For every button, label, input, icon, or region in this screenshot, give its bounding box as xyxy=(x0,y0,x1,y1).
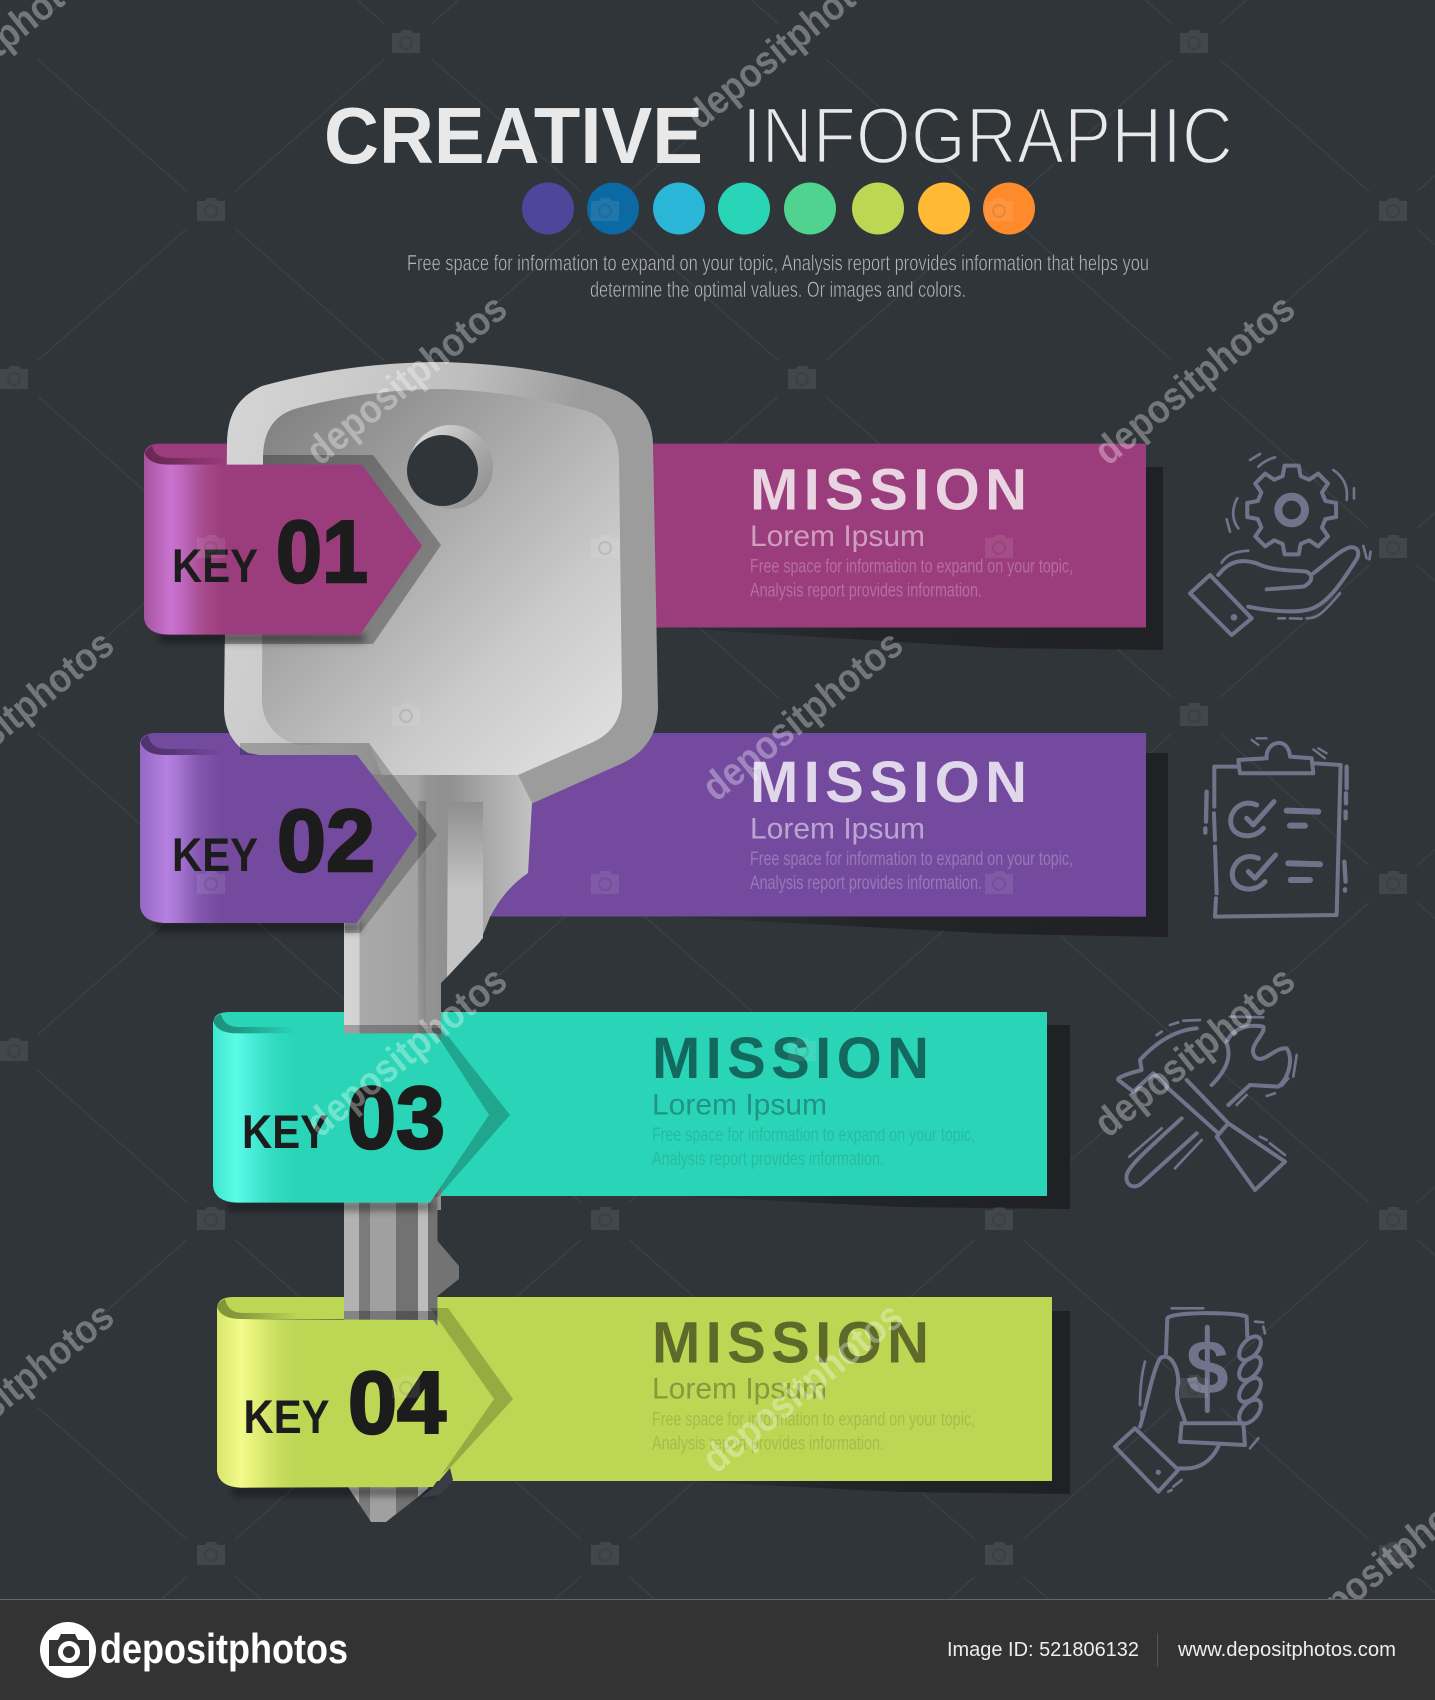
key head face xyxy=(262,389,622,775)
icon: clipboard checklist xyxy=(1205,738,1347,917)
key 04 label: 04 xyxy=(348,1353,446,1452)
watermark text: depositphotos xyxy=(298,286,515,474)
key 03 label xyxy=(242,1068,445,1167)
title: INFOGRAPHIC xyxy=(742,91,1233,180)
colour dots xyxy=(522,182,1035,234)
panel text: mission 3: Analysis report provides information. xyxy=(652,1149,884,1170)
key xyxy=(224,362,658,1530)
footer logo xyxy=(40,1622,348,1678)
key shaft grooves xyxy=(418,801,483,1041)
icon: hand holding gear xyxy=(1190,454,1371,635)
panel text: mission 2: Analysis report provides information. xyxy=(750,873,982,894)
key 01 label xyxy=(172,502,368,601)
key 03 label: 03 xyxy=(347,1068,445,1167)
key hole xyxy=(407,425,493,509)
title xyxy=(324,91,1233,180)
ribbon 3 front: key 03 xyxy=(213,1021,489,1203)
ribbon back bands xyxy=(140,444,1146,1481)
icon: hand holding phone with dollar: $ xyxy=(1186,1326,1229,1411)
panel text: mission 4: Lorem Ipsum xyxy=(652,1372,827,1406)
key 02 label xyxy=(172,791,375,890)
panel text: mission 1 xyxy=(750,458,1073,602)
ribbon 2 front: key 02 xyxy=(140,741,418,923)
ribbon 4 front: key 04 xyxy=(217,1307,494,1488)
watermark text: depositphotos xyxy=(1086,958,1303,1146)
key head rim xyxy=(224,362,658,810)
watermark text: depositphotos xyxy=(694,1294,911,1482)
title: CREATIVE xyxy=(324,91,703,180)
panel text: mission 3: Free space for information to expand on your topic, xyxy=(652,1125,975,1146)
key 02 label: 02 xyxy=(277,791,375,890)
panel text: mission 3 xyxy=(652,1026,975,1170)
panel text: mission 1: Analysis report provides information. xyxy=(750,580,982,602)
watermark text: depositphotos xyxy=(694,622,911,810)
key 02 label: KEY xyxy=(172,828,258,881)
subtitle xyxy=(407,250,1149,302)
panel text: mission 2: MISSION xyxy=(750,750,1027,815)
arrow shadows xyxy=(224,455,513,1487)
watermark text: depositphotos xyxy=(1086,286,1303,474)
footer bar xyxy=(0,1599,1435,1700)
subtitle: determine the optimal values. Or images and colors. xyxy=(590,277,966,302)
panel text: mission 2: Lorem Ipsum xyxy=(750,812,925,846)
icon: hand holding phone with dollar xyxy=(1115,1308,1265,1492)
key 04 label xyxy=(244,1353,446,1452)
subtitle: Free space for information to expand on your topic, Analysis report provides information that helps you xyxy=(407,250,1149,276)
panel text: mission 4: Free space for information to expand on your topic, xyxy=(652,1410,975,1430)
panel text: mission 1: Lorem Ipsum xyxy=(750,520,925,553)
panel text: mission 4: MISSION xyxy=(652,1310,929,1376)
key 01 label: KEY xyxy=(172,539,258,592)
footer url: www.depositphotos.com xyxy=(1177,1639,1396,1661)
ribbon 1 front: key 01 xyxy=(144,452,422,635)
panel text: mission 3: Lorem Ipsum xyxy=(652,1088,827,1122)
footer image id: Image ID: 521806132 xyxy=(947,1639,1139,1661)
panel text: mission 3: MISSION xyxy=(652,1026,929,1091)
watermark text: depositphotos xyxy=(298,958,515,1146)
footer logo: depositphotos xyxy=(100,1625,348,1672)
arrow corner details xyxy=(420,1038,458,1498)
panel text: mission 1: MISSION xyxy=(750,458,1027,522)
key 04 label: KEY xyxy=(244,1390,330,1443)
panel text: mission 1: Free space for information to expand on your topic, xyxy=(750,556,1073,578)
panel shadows xyxy=(620,467,1168,1494)
panel text: mission 2: Free space for information to expand on your topic, xyxy=(750,849,1073,870)
panel text: mission 2 xyxy=(750,750,1073,894)
key 03 label: KEY xyxy=(242,1105,328,1158)
ribbon drop shadows xyxy=(156,634,437,1495)
key lower shaft xyxy=(344,1190,460,1530)
icon: hammer and wrench xyxy=(1118,1017,1297,1190)
panel text: mission 4 xyxy=(652,1310,975,1454)
panel text: mission 4: Analysis report provides information. xyxy=(652,1434,884,1454)
key neck and upper shaft xyxy=(344,770,532,1210)
key 01 label: 01 xyxy=(276,502,368,601)
